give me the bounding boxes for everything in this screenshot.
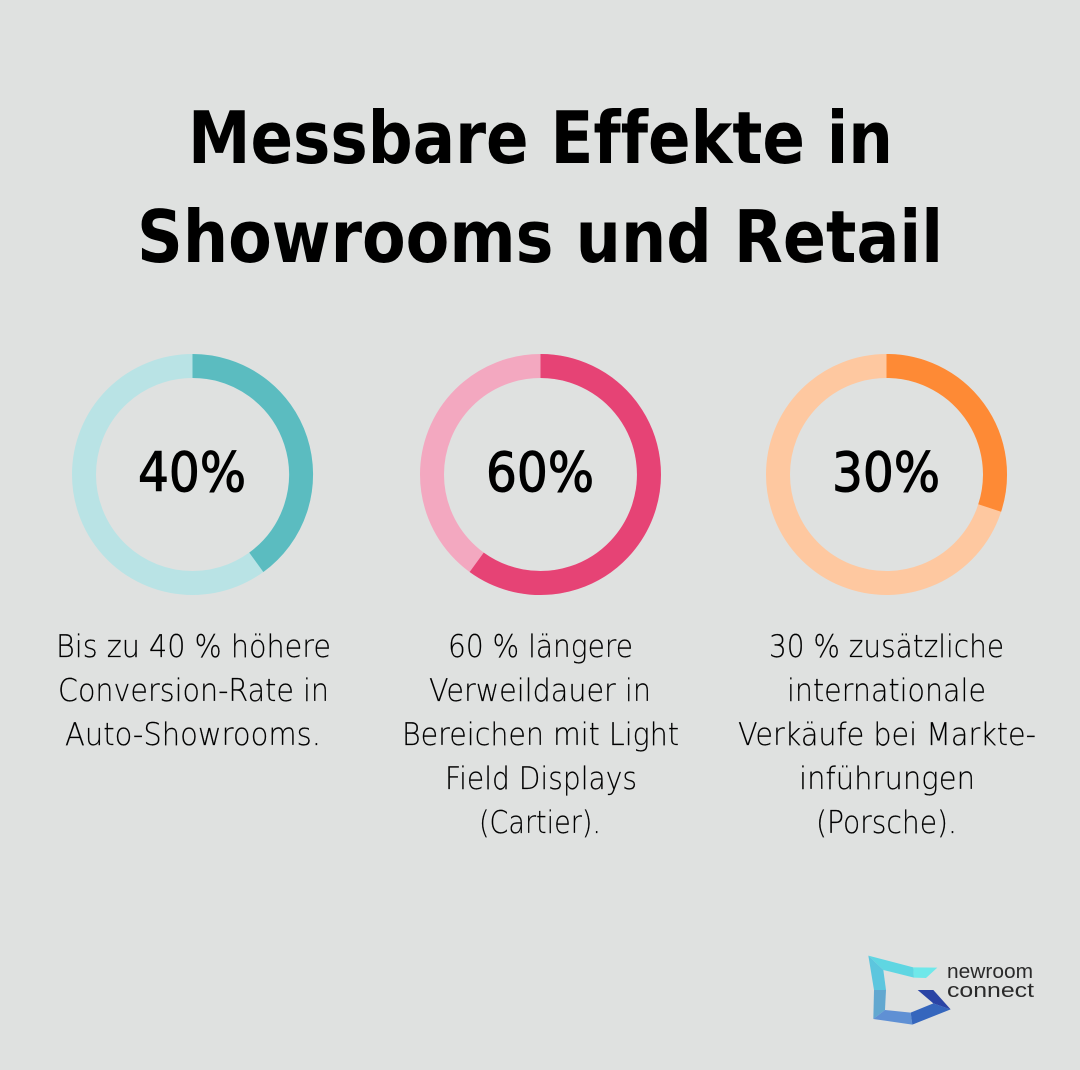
title [137, 96, 943, 279]
description: 30%: 30 % zusätzliche [769, 629, 1004, 665]
description: 30%: internationale [787, 673, 986, 709]
description: 30%: (Porsche). [816, 805, 957, 841]
description: 60%: (Cartier). [479, 805, 601, 841]
logo wordmark [947, 961, 1035, 1002]
logo wordmark: newroom [947, 961, 1033, 983]
donut chart: 60% [432, 366, 649, 583]
description: 30% [738, 629, 1036, 841]
panel: 30% stat [738, 366, 1036, 841]
panel: 60% stat [402, 366, 679, 841]
donut chart: 40% [84, 366, 301, 583]
icon: logo mark [868, 956, 951, 1025]
description: 60%: Verweildauer in [429, 673, 651, 709]
description: 40% [56, 629, 331, 753]
description: 60%: Field Displays [445, 761, 637, 797]
description: 30%: inführungen [799, 761, 975, 797]
title: Showrooms und Retail [137, 195, 943, 279]
value: 40%: 40% [138, 441, 246, 504]
logo wordmark: connect [947, 980, 1035, 1002]
description: 40%: Bis zu 40 % höhere [56, 629, 331, 665]
logo: newroom connect [868, 956, 1035, 1025]
value: 30%: 30% [832, 441, 940, 504]
description: 40%: Conversion-Rate in [58, 673, 329, 709]
description: 60% [402, 629, 679, 841]
title: Messbare Effekte in [188, 96, 893, 180]
description: 60%: Bereichen mit Light [402, 717, 679, 753]
description: 30%: Verkäufe bei Markte- [738, 717, 1036, 753]
description: 40%: Auto-Showrooms. [65, 717, 321, 753]
panel: 40% stat [56, 366, 331, 753]
value: 60%: 60% [486, 441, 594, 504]
donut chart: 30% [778, 366, 995, 583]
description: 60%: 60 % längere [448, 629, 633, 665]
